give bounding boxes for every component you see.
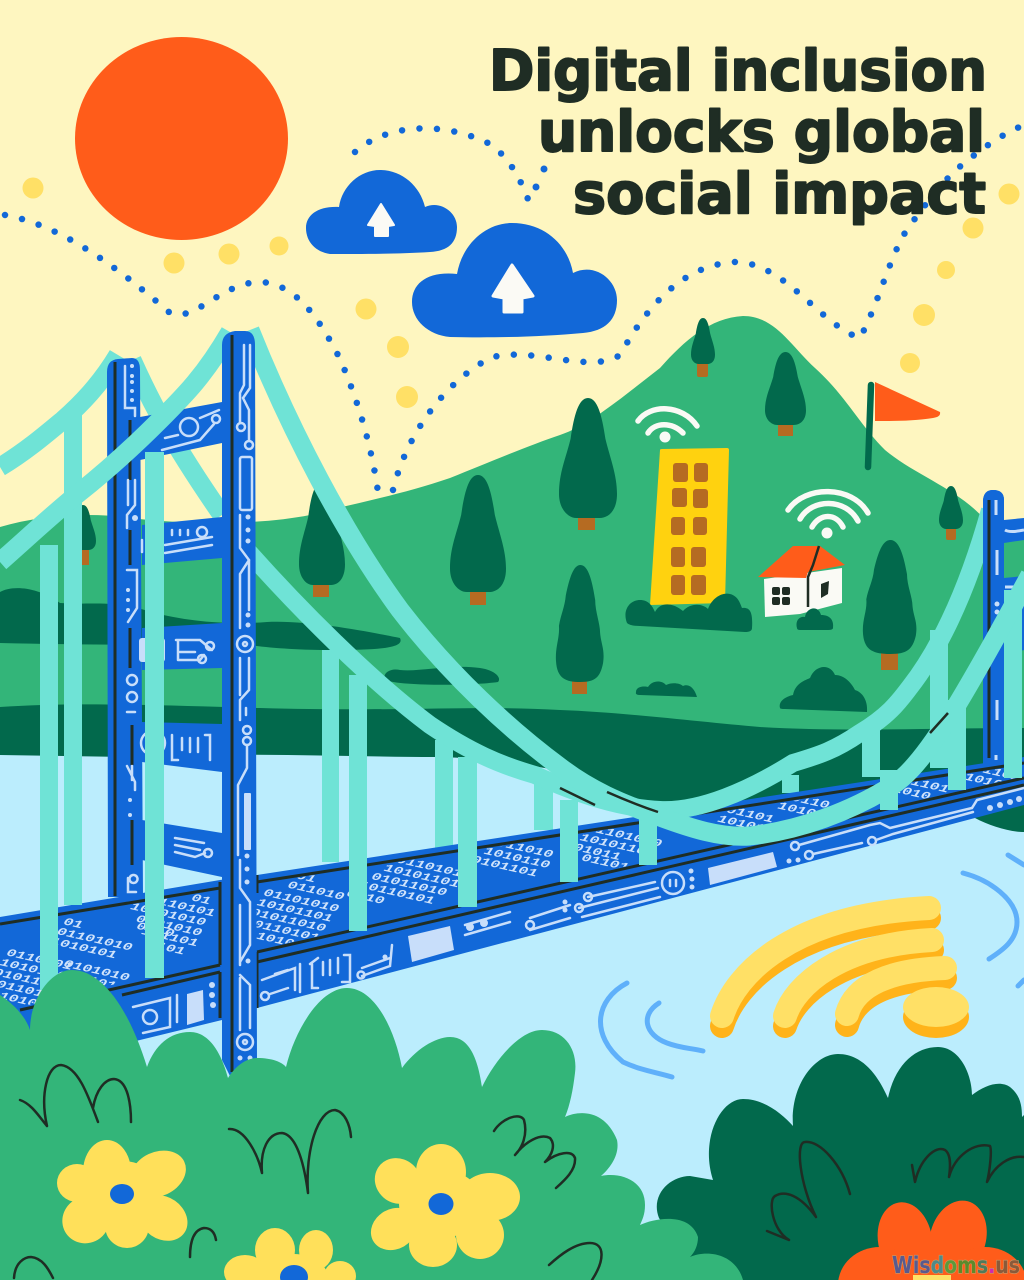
deck binary data: 101101 <box>138 926 201 950</box>
house <box>758 546 845 630</box>
title line 3: social impact <box>573 162 986 227</box>
deck binary data: 1010101 <box>47 936 120 962</box>
foreground light bush <box>0 970 743 1280</box>
deck binary data: 01101010 <box>393 854 475 882</box>
deck binary data: 011010 <box>493 837 556 861</box>
deck binary data: 01101010 <box>260 887 342 915</box>
cloud: large upload <box>412 223 617 337</box>
deck binary data: 01 <box>188 892 214 908</box>
orange flower <box>838 1194 1024 1280</box>
right tower <box>983 490 1024 775</box>
deck binary data: 0101101 <box>468 854 541 880</box>
gold shadow arcs <box>722 918 945 1026</box>
yellow arcs <box>722 908 945 1016</box>
deck binary data: 10110101 <box>240 917 322 945</box>
cloud: small upload <box>306 170 457 254</box>
tree 2 <box>765 352 806 436</box>
deck binary data: 0110 <box>788 792 833 812</box>
deck binary data: 011010 <box>234 926 297 950</box>
bridge deck <box>0 757 1024 1041</box>
far tower circuits <box>125 366 138 892</box>
right tower top overlay <box>983 490 1004 600</box>
bush scribbles <box>14 1065 1024 1280</box>
building windows <box>671 463 708 595</box>
yellow flower right <box>363 1144 520 1267</box>
deck binary data: 01101 <box>578 852 632 874</box>
beam circuits <box>141 410 220 857</box>
flower centre <box>428 1193 454 1215</box>
teal back verticals <box>322 630 948 862</box>
deck binary data: 10101 <box>714 814 768 835</box>
cable: far tower left <box>0 355 118 467</box>
deck binary data: 01011010 <box>247 907 329 935</box>
deck binary data: 01101 <box>723 804 777 826</box>
icon: small upload arrow <box>368 204 394 236</box>
dark hill band lower <box>0 704 1024 835</box>
house window <box>772 587 790 605</box>
bush at house <box>797 608 833 630</box>
tree 8 <box>863 540 916 670</box>
tree 6 <box>556 565 604 694</box>
deck binary data: 10110101 <box>355 880 437 908</box>
crossbeams <box>139 402 222 877</box>
bridge: far tower <box>107 358 143 897</box>
river ripples <box>601 855 1024 1077</box>
flower centre <box>280 1265 308 1280</box>
title line 2: unlocks global <box>538 100 985 165</box>
small bushes on hill <box>384 667 867 712</box>
deck binary data: 0110 <box>343 888 388 907</box>
deck binary data: 0110101 <box>145 894 218 920</box>
tree 7 <box>939 486 963 540</box>
dotted signal paths <box>5 125 1024 492</box>
main cable front <box>250 330 1024 836</box>
deck binary data: 0110101 <box>3 947 76 973</box>
foreground dark bush <box>657 1047 1024 1280</box>
watermark: Wisdoms.us <box>892 1253 1020 1279</box>
trees <box>70 318 963 694</box>
house door window <box>821 581 829 598</box>
teal front verticals <box>40 415 1022 990</box>
dark hill band upper <box>0 588 401 650</box>
deck binary data: 01 <box>60 916 86 932</box>
wifi disc <box>903 996 969 1038</box>
title <box>489 39 987 227</box>
deck binary data: 10101 <box>774 800 828 822</box>
title line 1: Digital inclusion <box>489 39 987 104</box>
flower centre <box>110 1184 134 1204</box>
deck binary data <box>0 762 1024 1012</box>
deck binary data: 10101101 <box>380 863 462 891</box>
wifi icon: house <box>788 492 868 538</box>
deck binary data: 01101010 <box>53 926 135 954</box>
tree 5 <box>299 482 345 597</box>
tree 3 <box>559 398 617 530</box>
yellow flower left <box>53 1140 196 1253</box>
mountain and hills <box>0 316 1024 800</box>
flag <box>868 382 940 467</box>
building <box>650 448 729 605</box>
deck black rails <box>0 763 1024 1018</box>
deck binary data: 01 <box>293 870 319 886</box>
deck binary data: 0110 <box>133 921 178 940</box>
deck binary data: 01101 <box>970 762 1024 784</box>
tree 4 <box>450 475 506 605</box>
cable: far tower back span <box>132 360 222 515</box>
deck binary data: 01011010 <box>368 871 450 899</box>
near tower circuits <box>237 345 253 1050</box>
deck binary data: 10101010 <box>127 901 209 929</box>
deck binary data: 01101010 <box>583 822 665 850</box>
flower yellow centre <box>913 1275 951 1280</box>
deck binary data: 10101 <box>65 971 119 992</box>
yellow dots <box>22 178 1020 408</box>
near tower black line <box>230 335 234 1072</box>
deck binary data: 10101101 <box>576 832 658 860</box>
deck binary data: 01101 <box>898 774 952 796</box>
yellow flower bottom <box>224 1228 356 1280</box>
far tower black lines <box>114 362 116 896</box>
deck binary data: 10101 <box>961 772 1015 793</box>
bush below building <box>625 594 752 632</box>
icon: large upload arrow <box>493 265 533 312</box>
deck binary data: 1010 <box>889 784 934 803</box>
main cable back <box>245 510 990 810</box>
deck binary data: 10101101 <box>253 897 335 925</box>
cable black accents <box>560 713 948 812</box>
deck binary data: 1010110 <box>480 846 553 872</box>
golden wifi symbol in river <box>722 908 969 1038</box>
cable: near tower left <box>0 332 230 562</box>
tree 1 <box>691 318 715 377</box>
deck side circuits <box>133 788 1024 1033</box>
wifi icon: building <box>638 409 697 442</box>
deck binary data: 011010 <box>284 880 347 903</box>
deck binary data: 01 <box>936 768 962 784</box>
river <box>0 755 1024 1280</box>
tree 9 <box>70 505 96 565</box>
deck binary data: 0101 <box>143 938 188 958</box>
near tower <box>222 331 257 1078</box>
extra signal dots <box>532 166 548 190</box>
deck binary data: 0101010 <box>132 913 205 939</box>
deck binary data: 0101010 <box>60 958 133 984</box>
deck binary data: 01011 <box>570 842 624 863</box>
sun <box>75 37 288 240</box>
